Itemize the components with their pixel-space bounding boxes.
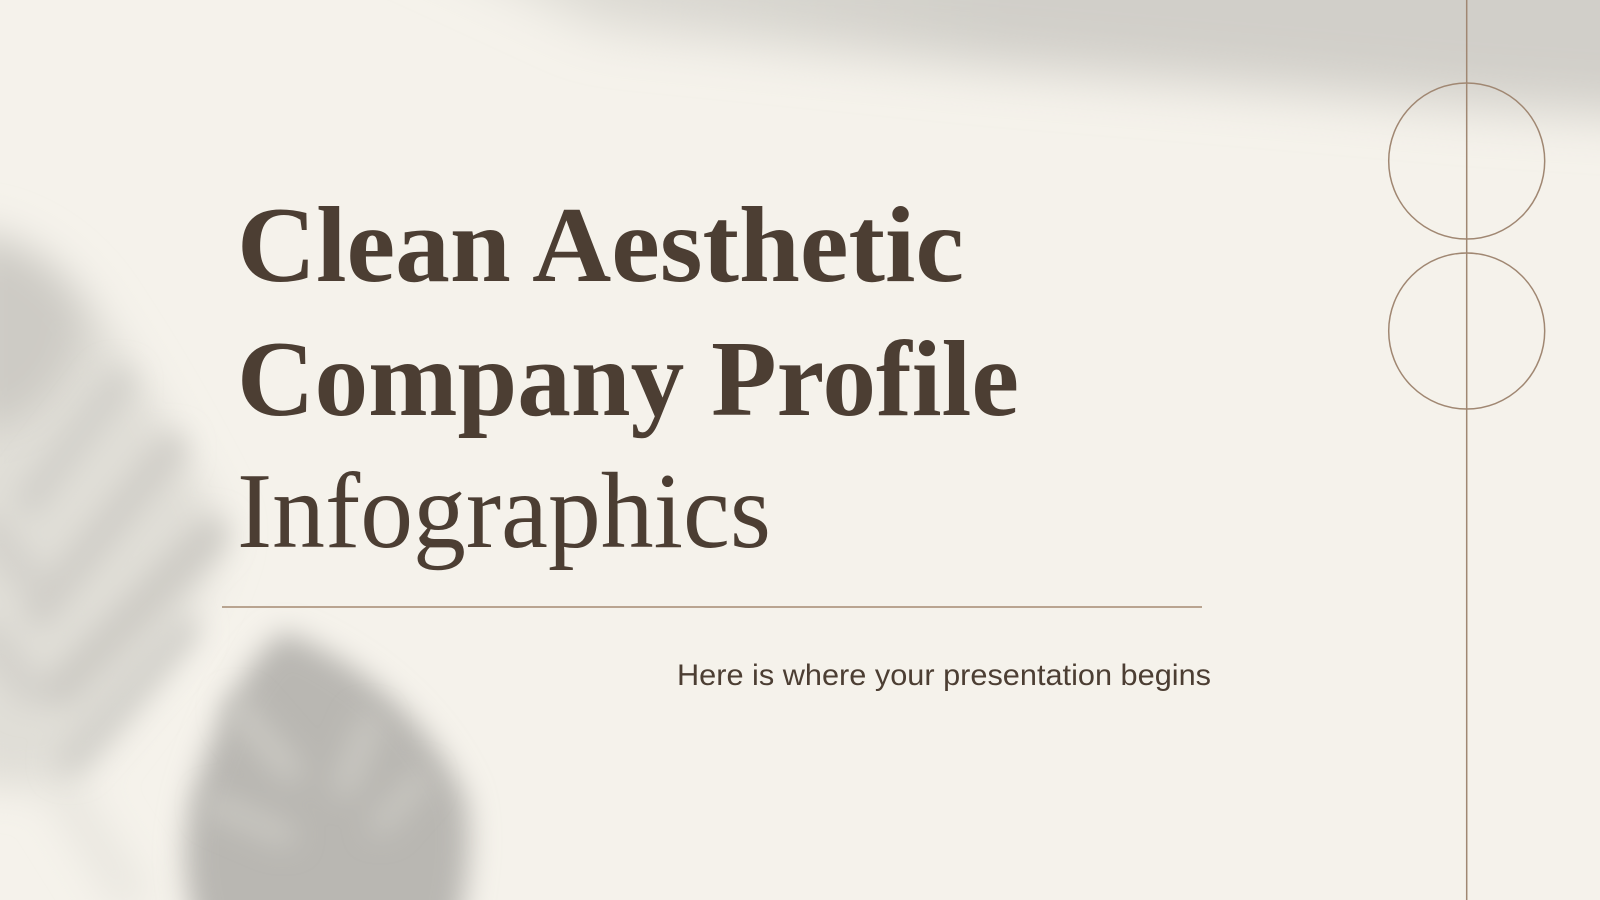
title line 3: Infographics bbox=[237, 452, 771, 571]
title line 1: Clean Aesthetic bbox=[237, 186, 964, 305]
divider line bbox=[222, 606, 1202, 608]
palm leaflets bbox=[0, 385, 210, 760]
shadow: top branch bbox=[370, 0, 1600, 118]
title line 2: Company Profile bbox=[237, 320, 1019, 439]
vertical line with circles bbox=[1389, 0, 1545, 900]
monstera body bbox=[185, 632, 469, 900]
title bbox=[237, 186, 1019, 571]
shadow: monstera leaf bbox=[185, 632, 469, 900]
palm body bbox=[0, 225, 225, 900]
subtitle: Here is where your presentation begins bbox=[677, 659, 1211, 692]
monstera gaps bbox=[215, 710, 420, 835]
upper circle bbox=[1389, 83, 1545, 239]
lower circle bbox=[1389, 253, 1545, 409]
shadow: palm leaf bbox=[0, 225, 225, 900]
